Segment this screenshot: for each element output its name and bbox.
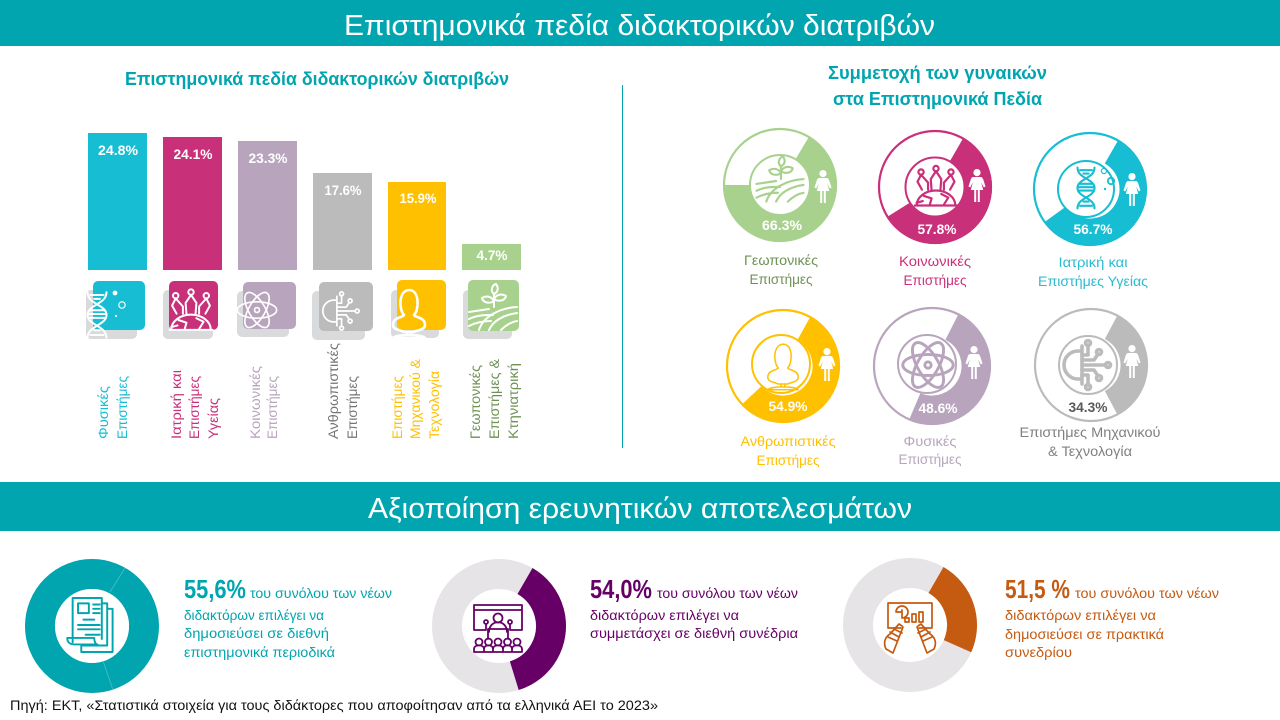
panel: conferences 54,0% — [428, 555, 798, 697]
section title: Αξιοποίηση ερευνητικών αποτελεσμάτων — [368, 493, 912, 525]
donut: Ανθρωπιστικές Επιστήμες 54.9%: Ανθρωπιστικές — [740, 433, 836, 449]
bar: Γεωπονικές Επιστήμες & Κτηνιατρική: 4.7% — [476, 247, 508, 263]
text: journals — [184, 574, 392, 660]
bar: Ιατρική και Επιστήμες Υγείας: 24.1% — [174, 146, 213, 162]
donut: Φυσικές Επιστήμες 48.6%: Φυσικές — [904, 433, 957, 449]
bar: Φυσικές Επιστήμες: Φυσικές — [95, 386, 111, 439]
bar: Ανθρωπιστικές Επιστήμες — [312, 173, 373, 439]
heading: women's participation — [828, 63, 1047, 109]
bar: Γεωπονικές Επιστήμες & Κτηνιατρική: Γεωπονικές — [467, 365, 483, 439]
donut: Γεωπονικές Επιστήμες 66.3%: Γεωπονικές — [744, 252, 818, 268]
header band: research exploitation — [0, 482, 1280, 531]
bar: Κοινωνικές Επιστήμες: 23.3% — [248, 150, 288, 166]
bar: Φυσικές Επιστήμες: Επιστήμες — [114, 376, 130, 439]
bar: Επιστήμες Μηχανικού & Τεχνολογία: Επιστήμες — [389, 376, 405, 439]
donut: Επιστήμες Μηχανικού & Τεχνολογία 34.3%: 34.3% — [1068, 399, 1108, 415]
donut: Επιστήμες Μηχανικού & Τεχνολογία 34.3%: & Τεχνολογία — [1048, 443, 1132, 459]
donut: conferences — [428, 555, 570, 697]
bar: Φυσικές Επιστήμες — [86, 133, 147, 439]
text: proceedings: συνεδρίου — [1005, 644, 1072, 660]
text: conferences: συμμετάσχει σε διεθνή συνέδρια — [590, 625, 798, 641]
bar: Ανθρωπιστικές Επιστήμες: Επιστήμες — [344, 376, 360, 439]
text: conferences: διδακτόρων επιλέγει να — [590, 607, 739, 623]
donut: proceedings — [839, 554, 981, 696]
donut: Γεωπονικές Επιστήμες 66.3%: 66.3% — [762, 217, 803, 233]
text: proceedings — [1005, 574, 1219, 660]
text: conferences — [590, 574, 798, 641]
donut: Ιατρική και Επιστήμες Υγείας 56.7% — [1031, 130, 1149, 289]
bar: Ανθρωπιστικές Επιστήμες: Ανθρωπιστικές — [325, 343, 341, 439]
donut: Επιστήμες Μηχανικού & Τεχνολογία 34.3%: Επιστήμες Μηχανικού — [1020, 424, 1160, 440]
donut: Ανθρωπιστικές Επιστήμες 54.9% — [725, 308, 841, 468]
text: journals: 55,6% — [184, 574, 246, 604]
text: proceedings: διδακτόρων επιλέγει να — [1005, 607, 1156, 623]
bar: Ιατρική και Επιστήμες Υγείας: Υγείας — [205, 398, 221, 439]
panel: journals 55,6% — [40, 568, 392, 690]
donut: Κοινωνικές Επιστήμες 57.8% — [876, 128, 994, 288]
header band: scientific fields — [0, 0, 1280, 46]
heading: bar chart: Επιστημονικά πεδία διδακτορικών διατριβών — [125, 69, 509, 89]
donut: Κοινωνικές Επιστήμες 57.8%: 57.8% — [918, 221, 957, 237]
donut: Ανθρωπιστικές Επιστήμες 54.9%: 54.9% — [768, 398, 808, 414]
text: conferences: 54,0% — [590, 574, 652, 604]
source note: Πηγή: ΕΚΤ, «Στατιστικά στοιχεία για τους διδάκτορες που αποφοίτησαν από τα ελληνικά ΑΕΙ το 2023» — [10, 697, 658, 713]
heading: women's participation: στα Επιστημονικά Πεδία — [833, 89, 1042, 109]
text: conferences: του συνόλου των νέων — [657, 585, 798, 601]
donut: Ιατρική και Επιστήμες Υγείας 56.7%: Επιστήμες Υγείας — [1038, 273, 1148, 289]
text: journals: δημοσιεύσει σε διεθνή — [184, 625, 329, 641]
donut: Κοινωνικές Επιστήμες 57.8%: Επιστήμες — [904, 272, 967, 288]
title: Επιστημονικά πεδία διδακτορικών διατριβών — [344, 10, 935, 42]
donut: Ιατρική και Επιστήμες Υγείας 56.7%: 56.7% — [1074, 221, 1113, 237]
donut: Φυσικές Επιστήμες 48.6%: Επιστήμες — [898, 451, 962, 467]
heading: women's participation: Συμμετοχή των γυναικών — [828, 63, 1047, 83]
text: journals: του συνόλου των νέων — [250, 585, 392, 601]
donut: Κοινωνικές Επιστήμες 57.8%: Κοινωνικές — [899, 253, 971, 269]
bar: Ανθρωπιστικές Επιστήμες: 17.6% — [324, 182, 362, 198]
bar: Γεωπονικές Επιστήμες & Κτηνιατρική — [462, 244, 521, 439]
panel: women's participation donuts — [720, 125, 1160, 468]
text: proceedings: του συνόλου των νέων — [1075, 585, 1219, 601]
bar: Κοινωνικές Επιστήμες — [237, 141, 297, 439]
donut: Γεωπονικές Επιστήμες 66.3% — [720, 125, 840, 287]
text: journals: επιστημονικά περιοδικά — [184, 644, 335, 660]
text: proceedings: 51,5 % — [1005, 574, 1070, 604]
bar: Κοινωνικές Επιστήμες: Κοινωνικές — [247, 366, 263, 439]
donut: Επιστήμες Μηχανικού & Τεχνολογία 34.3% — [1020, 307, 1160, 459]
text: proceedings: δημοσιεύσει σε πρακτικά — [1005, 626, 1164, 642]
text: journals: διδακτόρων επιλέγει να — [184, 607, 324, 623]
donut: Γεωπονικές Επιστήμες 66.3%: Επιστήμες — [750, 271, 813, 287]
donut: Ανθρωπιστικές Επιστήμες 54.9%: Επιστήμες — [756, 452, 820, 468]
panel: conference proceedings 51,5% — [839, 554, 1219, 696]
bar: Επιστήμες Μηχανικού & Τεχνολογία: 15.9% — [400, 190, 437, 206]
donut: Ιατρική και Επιστήμες Υγείας 56.7%: Ιατρική και — [1058, 254, 1128, 270]
donut: Φυσικές Επιστήμες 48.6%: 48.6% — [918, 400, 958, 416]
donut: Φυσικές Επιστήμες 48.6% — [873, 307, 991, 467]
vertical divider between panels — [622, 85, 624, 448]
bar: Γεωπονικές Επιστήμες & Κτηνιατρική: Επιστήμες & — [486, 358, 502, 439]
bar: Ιατρική και Επιστήμες Υγείας — [163, 137, 222, 439]
bar chart: scientific fields of dissertations — [86, 133, 521, 439]
bar: Επιστήμες Μηχανικού & Τεχνολογία: Τεχνολογία — [426, 371, 442, 439]
bar: Κοινωνικές Επιστήμες: Επιστήμες — [264, 376, 280, 439]
bar: Φυσικές Επιστήμες: 24.8% — [98, 142, 139, 158]
donut: journals — [40, 568, 144, 690]
bar: Γεωπονικές Επιστήμες & Κτηνιατρική: Κτηνιατρική — [505, 363, 521, 439]
bar: Ιατρική και Επιστήμες Υγείας: Επιστήμες — [186, 376, 202, 439]
bar: Επιστήμες Μηχανικού & Τεχνολογία — [388, 182, 446, 439]
bar: Ιατρική και Επιστήμες Υγείας: Ιατρική και — [168, 370, 184, 439]
bar: Επιστήμες Μηχανικού & Τεχνολογία: Μηχανικού & — [407, 358, 423, 439]
